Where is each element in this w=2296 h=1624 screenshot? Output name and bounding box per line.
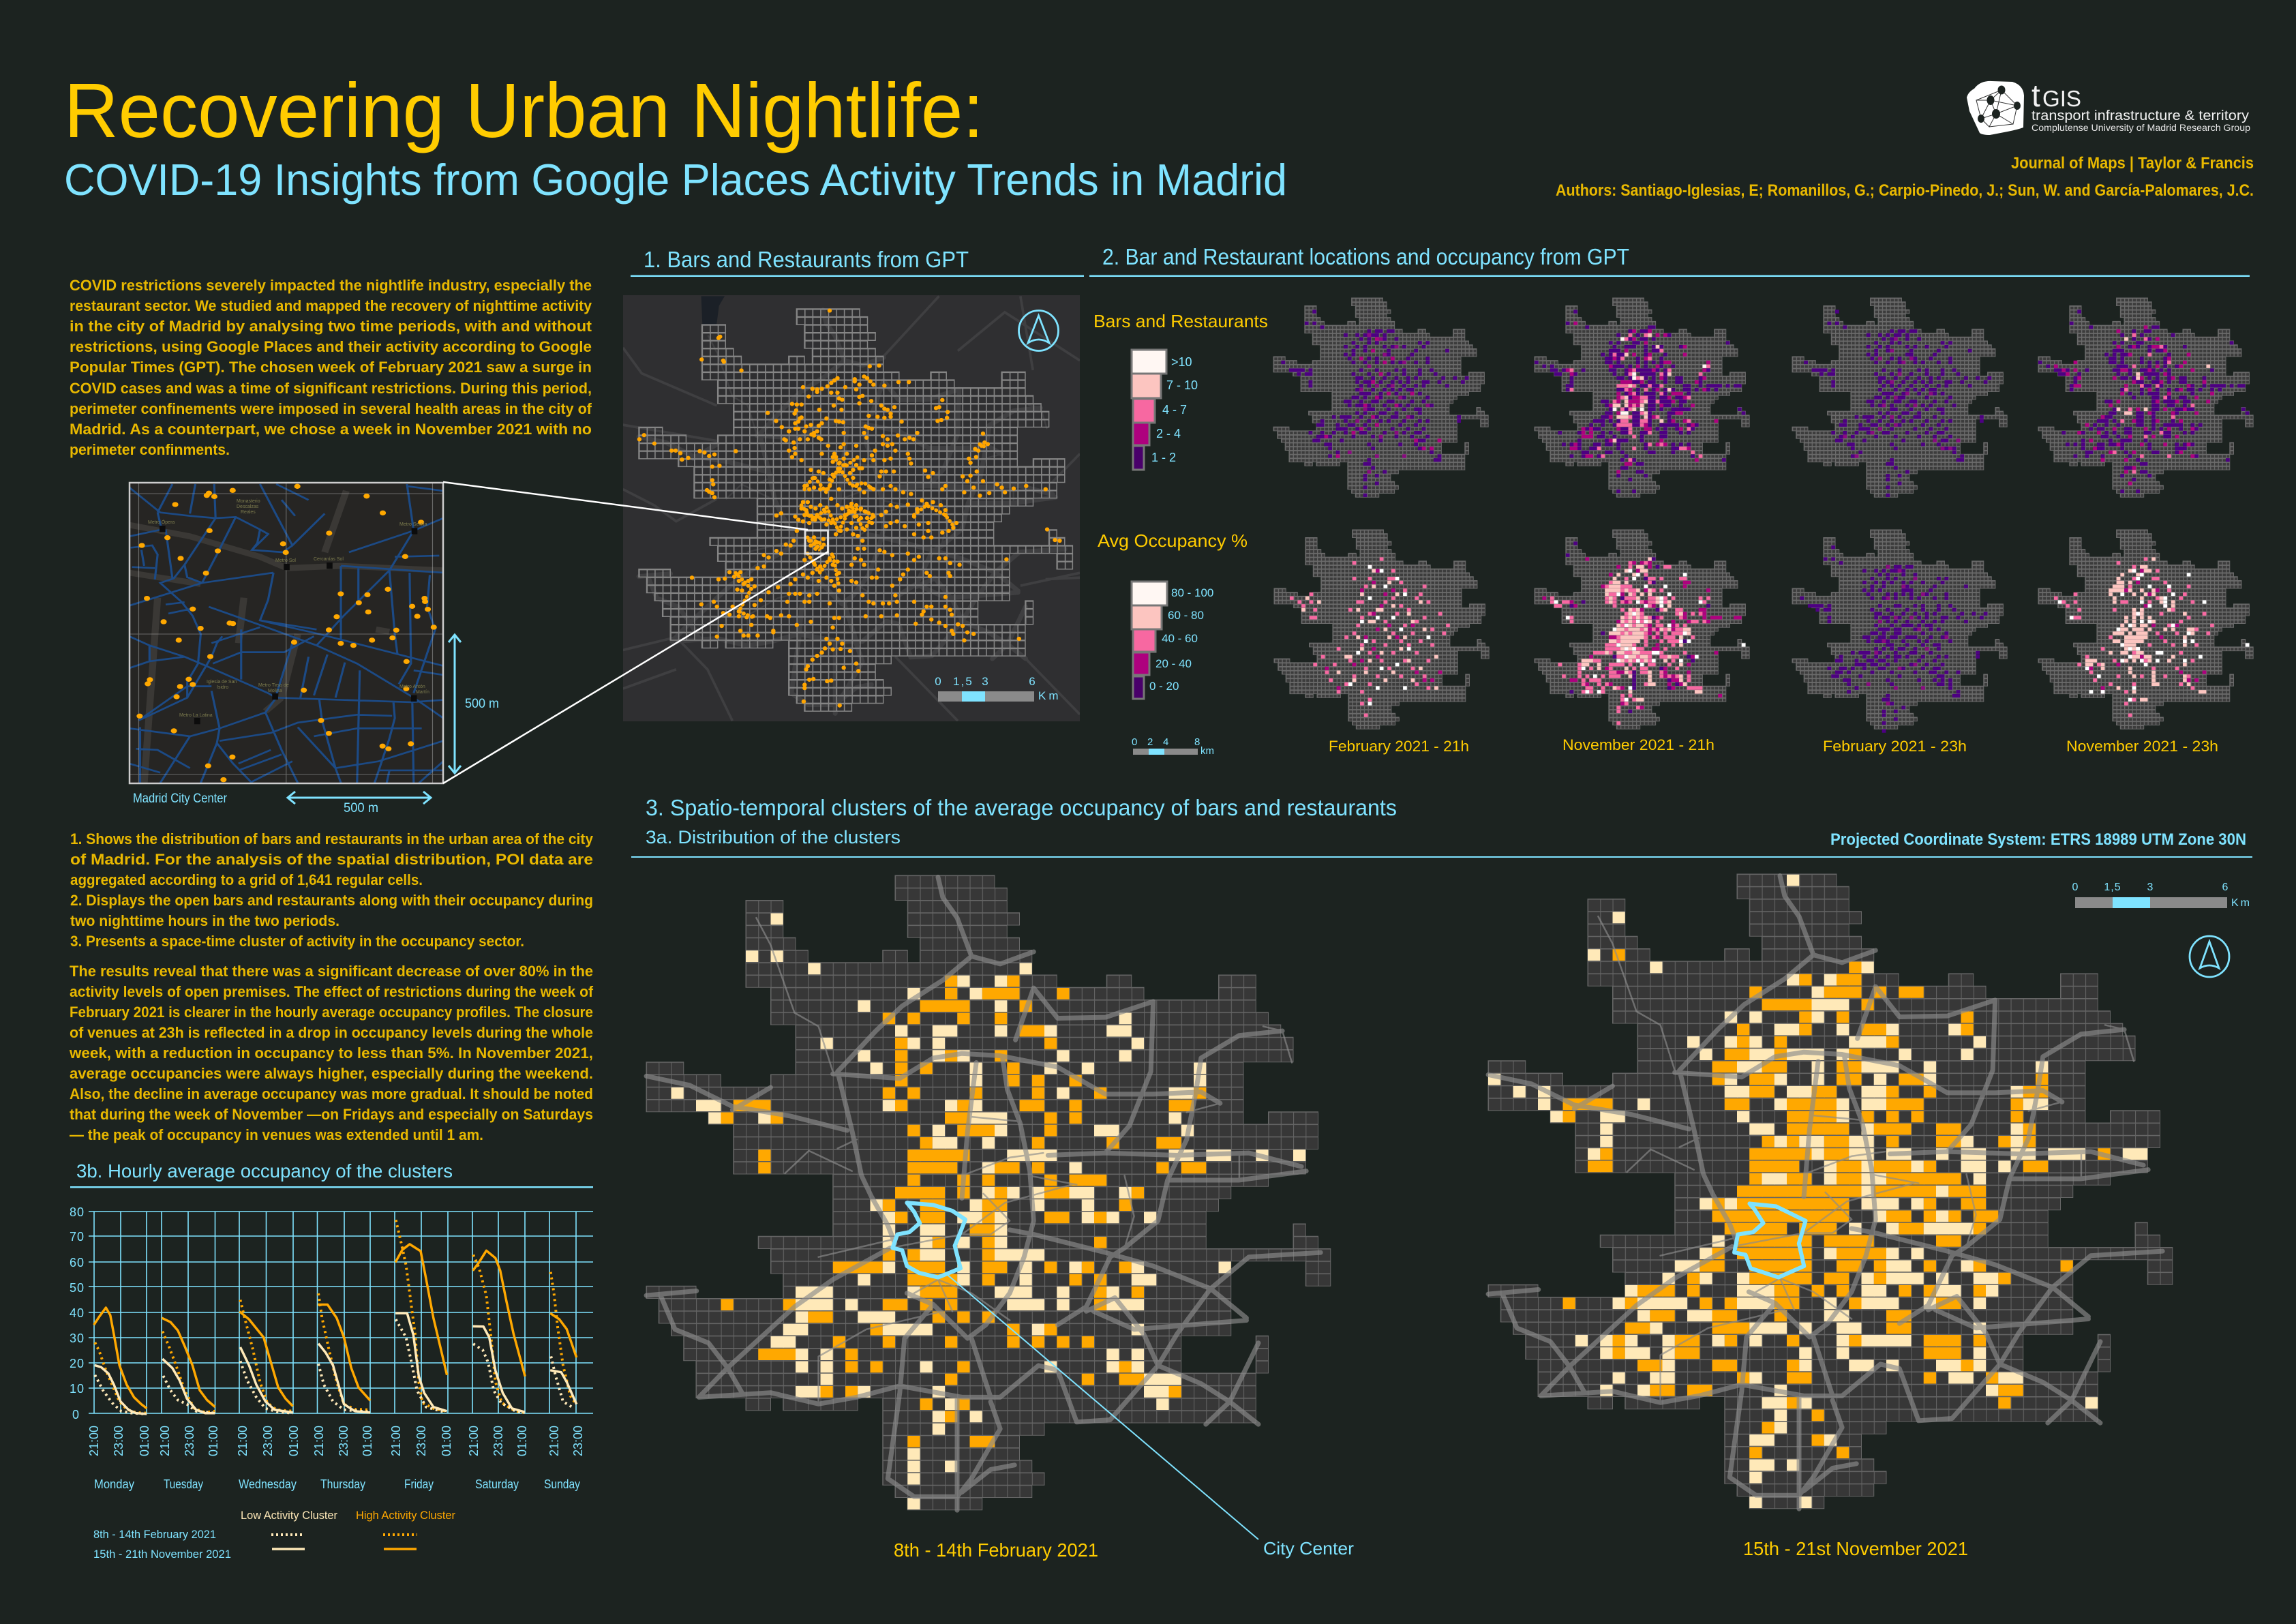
- leader line to City Center: [948, 1275, 1258, 1539]
- explanation text block: 1. Shows the distribution of bars and restaurants in the urban area of the city: [70, 830, 594, 847]
- inset place labels: [148, 499, 429, 718]
- x axis hour labels: 21:00: [158, 1426, 172, 1456]
- results text block: The results reveal that there was a significant decrease of over 80% in the: [70, 963, 593, 980]
- day labels: [94, 1477, 580, 1491]
- y axis labels: 0: [72, 1408, 80, 1422]
- legend: average occupancy: 40 - 60: [1162, 632, 1198, 645]
- explanation text block: 2. Displays the open bars and restaurants along with their occupancy during: [70, 892, 593, 909]
- map captions: February 2021 - 21h: [1329, 738, 1469, 755]
- heading: section 1: 1. Bars and Restaurants from GPT: [644, 247, 969, 272]
- panel: hourly occupancy chart: [70, 1160, 593, 1561]
- panel: Madrid city center inset map: [130, 483, 443, 784]
- scale bar: small maps: 4: [1163, 736, 1168, 748]
- chart legend: [93, 1509, 455, 1561]
- scale bar: cluster maps: 6: [2222, 882, 2229, 893]
- results text block: — the peak of occupancy in venues was extended until 1 am.: [70, 1126, 483, 1143]
- city center outline: [892, 1203, 965, 1278]
- inset place labels: Cercanías Sol: [314, 557, 344, 562]
- scale bar: 3: [982, 675, 988, 688]
- explanation text block: two nighttime hours in the two periods.: [70, 912, 339, 929]
- intro text block: restrictions, using Google Places and their activity according to Google: [70, 338, 592, 355]
- intro text block: perimeter confinments.: [70, 441, 230, 458]
- scale bar: Km: [1038, 689, 1061, 702]
- inset place labels: Descalzas: [237, 505, 259, 509]
- chart legend: Low Activity Cluster: [241, 1509, 337, 1522]
- inset place labels: Metro Antón: [399, 685, 425, 689]
- x axis hour labels: 23:00: [571, 1426, 585, 1456]
- label: Madrid City Center: Madrid City Center: [133, 792, 228, 806]
- x axis hour labels: 23:00: [337, 1426, 350, 1456]
- chart legend: 8th - 14th February 2021: [93, 1528, 216, 1541]
- x axis hour labels: 01:00: [287, 1426, 301, 1456]
- x axis hour labels: 01:00: [361, 1426, 374, 1456]
- day labels: Sunday: [544, 1477, 580, 1491]
- legend: average occupancy: 0 - 20: [1149, 680, 1179, 693]
- legend: bars and restaurants: Bars and Restaurants: [1093, 311, 1268, 331]
- y axis labels: 50: [70, 1281, 85, 1295]
- x axis hour labels: 23:00: [492, 1426, 505, 1456]
- map: clusters November: [1488, 874, 2173, 1509]
- heading: section 3: 3. Spatio-temporal clusters of the average occupancy of bars and restaurants: [646, 795, 1397, 820]
- heading: 3b: 3b. Hourly average occupancy of the clusters: [76, 1160, 453, 1182]
- journal line: Journal of Maps | Taylor & Francis: [2011, 154, 2254, 172]
- x axis hour labels: 21:00: [87, 1426, 101, 1456]
- inset place labels: Iglesia de San: [207, 680, 237, 685]
- results text block: week, with a reduction in occupancy to less than 5%. In November 2021,: [69, 1044, 593, 1062]
- logo wordmark letters: GIS: [2042, 86, 2081, 111]
- map: bars February 23h: [1792, 298, 2007, 497]
- intro text block: COVID restrictions severely impacted the nightlife industry, especially the: [70, 277, 592, 294]
- zoom connector lines: [443, 482, 828, 783]
- day labels: Thursday: [320, 1477, 365, 1491]
- map captions: November 2021 - 23h: [2066, 738, 2218, 755]
- intro text block: Madrid. As a counterpart, we chose a week in November 2021 with no: [70, 421, 592, 438]
- explanation text block: [70, 830, 594, 950]
- grid of cells: [639, 309, 1072, 711]
- y axis labels: 20: [70, 1357, 85, 1370]
- x axis hour labels: 23:00: [183, 1426, 196, 1456]
- projection note: Projected Coordinate System: ETRS 18989 UTM Zone 30N: [1830, 830, 2246, 849]
- inset place labels: Metro Sol: [275, 558, 296, 563]
- inset place labels: Metro Sevilla: [399, 522, 427, 527]
- subheading: 3a: 3a. Distribution of the clusters: [646, 827, 901, 847]
- legend: average occupancy: Avg Occupancy %: [1098, 530, 1248, 551]
- map captions: February 2021 - 23h: [1823, 738, 1967, 755]
- scale bar: cluster maps: 0: [2072, 882, 2079, 893]
- x axis hour labels: 01:00: [515, 1426, 529, 1456]
- inset place labels: Martín: [416, 690, 429, 695]
- y axis labels: 70: [70, 1230, 85, 1244]
- day labels: Wednesday: [239, 1477, 297, 1491]
- x axis hour labels: 21:00: [312, 1426, 326, 1456]
- x axis hour labels: 01:00: [138, 1426, 151, 1456]
- map: occupancy February 23h: [1792, 530, 2007, 731]
- inset place labels: Metro Tirso de: [258, 683, 289, 688]
- scale bar: small maps: [1132, 736, 1214, 757]
- map: occupancy February 21h: [1274, 530, 1489, 729]
- city center outline: [1734, 1203, 1806, 1278]
- panel: section 3 clusters: [631, 795, 2252, 1561]
- scale bar: 0: [935, 675, 941, 688]
- legend: bars and restaurants: [1093, 311, 1268, 470]
- x axis hour labels: 23:00: [414, 1426, 428, 1456]
- scale bar: cluster maps: [2072, 882, 2252, 909]
- icon: network blob: [1967, 81, 2024, 135]
- intro text block: Popular Times (GPT). The chosen week of February 2021 saw a surge in: [70, 359, 592, 376]
- inset place labels: Metro Ópera: [148, 519, 175, 525]
- intro text block: perimeter confinements were imposed in several health areas in the city of: [70, 400, 592, 417]
- results text block: that during the week of November —on Fridays and especially on Saturdays: [70, 1106, 593, 1123]
- intro text block: restaurant sector. We studied and mapped the recovery of nighttime activity: [70, 297, 592, 314]
- north arrow: [2190, 936, 2229, 977]
- results text block: Also, the decline in average occupancy was more gradual. It should be noted: [70, 1085, 593, 1102]
- legend: average occupancy: [1098, 530, 1248, 699]
- map: clusters February: [646, 875, 1331, 1510]
- chart grid: [89, 1212, 593, 1413]
- zoom square: [805, 530, 828, 554]
- y axis labels: 30: [70, 1332, 85, 1345]
- x axis hour labels: 01:00: [207, 1426, 220, 1456]
- legend: bars and restaurants: 7 - 10: [1166, 378, 1198, 392]
- y axis labels: [70, 1205, 85, 1422]
- caption: February: 8th - 14th February 2021: [894, 1539, 1098, 1561]
- map: bars November 23h: [2038, 298, 2253, 497]
- map captions: [1329, 736, 2218, 755]
- x axis hour labels: 21:00: [236, 1426, 250, 1456]
- y axis labels: 80: [70, 1205, 85, 1219]
- legend: average occupancy: 80 - 100: [1171, 586, 1213, 599]
- panel: section 2 small multiples: [1089, 244, 2253, 757]
- scale bar: cluster maps: Km: [2231, 897, 2252, 909]
- x axis hour labels: 21:00: [389, 1426, 403, 1456]
- y axis labels: 10: [70, 1382, 85, 1396]
- scale bar: [935, 675, 1061, 702]
- panel: section 1 map: [623, 247, 1084, 721]
- occupancy curves: [94, 1220, 577, 1414]
- label: City Center: City Center: [1263, 1538, 1354, 1559]
- inset streets: [130, 483, 443, 784]
- legend: average occupancy: 60 - 80: [1168, 609, 1204, 622]
- legend: bars and restaurants: 4 - 7: [1162, 403, 1187, 417]
- results text block: average occupancies were always higher, especially during the weekend.: [70, 1065, 593, 1082]
- results text block: [69, 963, 594, 1143]
- title: Recovering Urban Nightlife:: [64, 67, 984, 153]
- day labels: Tuesday: [164, 1477, 203, 1491]
- map: occupancy November 21h: [1535, 530, 1749, 729]
- x axis hour labels: 23:00: [112, 1426, 125, 1456]
- scale bar: small maps: 2: [1147, 736, 1153, 748]
- results text block: February 2021 is clearer in the hourly average occupancy profiles. The closure: [70, 1004, 593, 1021]
- scale bar: 6: [1029, 675, 1036, 688]
- scale bar: cluster maps: 1,5: [2104, 882, 2121, 893]
- map: bars February 21h: [1273, 298, 1488, 497]
- x axis hour labels: [87, 1426, 585, 1456]
- explanation text block: aggregated according to a grid of 1,641 regular cells.: [70, 871, 423, 888]
- y axis labels: 40: [70, 1306, 85, 1320]
- explanation text block: 3. Presents a space-time cluster of activity in the occupancy sector.: [70, 933, 524, 950]
- x axis hour labels: 23:00: [261, 1426, 275, 1456]
- x axis hour labels: 21:00: [547, 1426, 561, 1456]
- inset place labels: Reales: [241, 510, 256, 515]
- chart legend: High Activity Cluster: [356, 1509, 455, 1522]
- day labels: Monday: [94, 1477, 134, 1491]
- map: occupancy November 23h: [2038, 530, 2253, 729]
- results text block: of venues at 23h is reflected in a drop in occupancy levels during the whole: [70, 1024, 593, 1041]
- base map roads and water: [623, 296, 1080, 721]
- intro text block: COVID cases and was a time of significant restrictions. During this period,: [70, 380, 592, 397]
- label: horizontal 500 m: 500 m: [344, 801, 378, 815]
- legend: bars and restaurants: 2 - 4: [1156, 427, 1181, 440]
- scale bar: small maps: km: [1200, 745, 1214, 757]
- x axis hour labels: 01:00: [440, 1426, 453, 1456]
- map captions: November 2021 - 21h: [1562, 736, 1715, 753]
- inset place labels: Monasterio: [237, 499, 260, 504]
- intro text block: [70, 277, 592, 458]
- scale bar: 1,5: [953, 675, 973, 688]
- road network: [1488, 876, 2162, 1509]
- scale bar: cluster maps: 3: [2147, 882, 2154, 893]
- logo affiliation: Complutense University of Madrid Research Group: [2031, 122, 2250, 133]
- inset place labels: Molina: [268, 689, 282, 693]
- inset frame: [130, 483, 443, 783]
- arrow: vertical 500 m: [449, 635, 461, 773]
- road network: [646, 877, 1320, 1510]
- x axis hour labels: 21:00: [467, 1426, 481, 1456]
- results text block: activity levels of open premises. The effect of restrictions during the week of: [70, 983, 594, 1000]
- arrow: horizontal 500 m: [288, 792, 431, 804]
- day labels: Friday: [404, 1477, 434, 1491]
- inset place labels: Isidro: [217, 685, 228, 690]
- y axis labels: 60: [70, 1256, 85, 1269]
- logo: tGIS research group: [1967, 78, 2250, 135]
- legend: bars and restaurants: >10: [1171, 355, 1192, 369]
- subtitle: COVID-19 Insights from Google Places Activity Trends in Madrid: [64, 155, 1287, 205]
- legend: average occupancy: 20 - 40: [1155, 657, 1192, 670]
- logo wordmark: t: [2031, 78, 2040, 113]
- day labels: Saturday: [475, 1477, 519, 1491]
- intro text block: in the city of Madrid by analysing two time periods, with and without: [70, 318, 592, 335]
- map: bars November 21h: [1535, 298, 1749, 497]
- north arrow: [1018, 311, 1058, 350]
- heading: section 2: 2. Bar and Restaurant locations and occupancy from GPT: [1102, 244, 1629, 269]
- scale bar: small maps: 8: [1194, 736, 1200, 748]
- label: vertical 500 m: 500 m: [465, 697, 499, 711]
- inset place labels: Metro La Latina: [179, 713, 213, 718]
- legend: bars and restaurants: 1 - 2: [1151, 451, 1176, 464]
- POI dots: bars and restaurants: [639, 311, 1060, 706]
- logo tagline: transport infrastructure & territory: [2031, 108, 2249, 123]
- scale bar: small maps: 0: [1132, 736, 1137, 748]
- explanation text block: of Madrid. For the analysis of the spatial distribution, POI data are: [70, 851, 593, 868]
- caption: November: 15th - 21st November 2021: [1743, 1538, 1968, 1559]
- chart legend: 15th - 21th November 2021: [93, 1548, 231, 1561]
